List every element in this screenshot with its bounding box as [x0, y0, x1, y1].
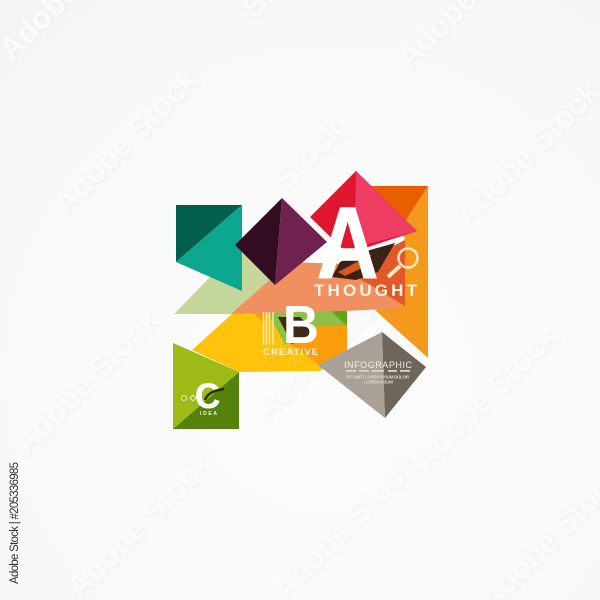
panel: red pyramid	[308, 171, 417, 280]
label: CREATIVE: CREATIVE	[263, 347, 318, 358]
panel: orange right shape	[371, 186, 428, 358]
label: THOUGHT: THOUGHT	[314, 281, 418, 300]
panel: yellow band	[192, 310, 347, 372]
label: INFOGRAPHIC: INFOGRAPHIC	[344, 360, 412, 370]
watermarks: Adobe Stock	[7, 302, 166, 461]
icon: circle and diamond	[181, 395, 196, 401]
icon: magnifier	[388, 248, 418, 277]
panel: green square	[173, 343, 239, 429]
panel: grey pyramid	[318, 332, 426, 418]
watermarks: Adobe Stock	[406, 318, 565, 477]
label: IDEA: IDEA	[200, 411, 217, 417]
watermarks: Adobe Stock	[46, 62, 205, 221]
infographic small text	[346, 374, 410, 384]
letter A: A	[317, 187, 378, 300]
side credit text: Adobe Stock | #205336985	[9, 462, 21, 584]
watermarks: Stock	[267, 112, 352, 197]
infographic composition	[173, 171, 428, 429]
panel: teal square	[176, 205, 242, 291]
panel: salmon triangle	[231, 240, 405, 314]
infographic small text: LOREM IPSUM	[364, 380, 393, 384]
panel: purple pyramid	[235, 198, 327, 285]
decorative dashes	[346, 370, 410, 372]
icon: vertical stripes	[264, 312, 273, 345]
infographic small text: SIT AMET LOREM IPSUM DOLOR	[346, 374, 410, 380]
letter C: C	[195, 377, 220, 416]
panel: pale green triangle	[174, 236, 285, 314]
letter B: B	[283, 294, 319, 354]
watermarks: Adobe Stock	[248, 268, 407, 427]
